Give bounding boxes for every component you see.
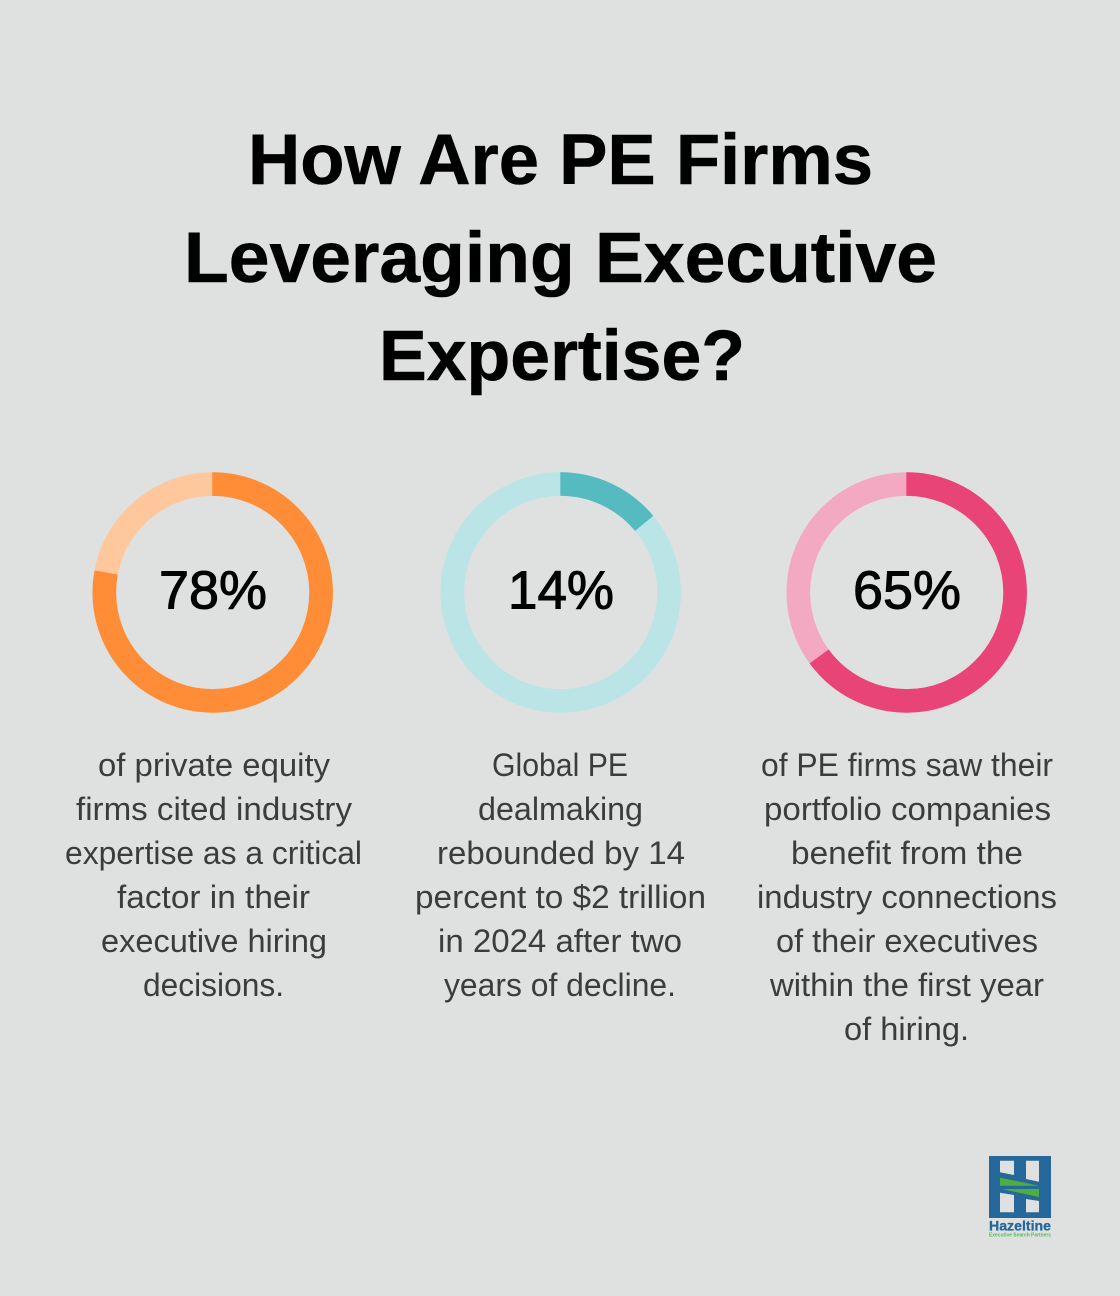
description: industry connections: within the first year: [769, 967, 1044, 1003]
value: 14%: 14%: [508, 560, 614, 620]
description: industry connections: portfolio companies: [764, 791, 1051, 827]
logo wordmark: Hazeltine: [989, 1218, 1051, 1234]
title: Expertise?: [379, 317, 745, 396]
panel: 78% statistic: [65, 484, 362, 1003]
donut chart: 14%: [452, 484, 669, 701]
title: [184, 121, 937, 396]
description: industry expertise: [65, 747, 362, 1003]
description: global dealmaking: percent to $2 trillion: [415, 879, 706, 915]
description: industry connections: benefit from the: [791, 835, 1023, 871]
donut chart: 65%: [798, 484, 1015, 701]
description: industry connections: of hiring.: [844, 1011, 969, 1047]
panel: 14% statistic: [415, 484, 706, 1003]
description: industry connections: of PE firms saw their: [761, 747, 1053, 783]
description: industry expertise: factor in their: [117, 879, 310, 915]
logo tagline: Executive Search Partners: [989, 1232, 1051, 1238]
description: global dealmaking: [415, 747, 706, 1003]
description: global dealmaking: in 2024 after two: [438, 923, 682, 959]
value: 65%: 65%: [853, 560, 961, 620]
description: industry expertise: firms cited industry: [76, 791, 352, 827]
description: industry connections: [757, 747, 1057, 1047]
description: global dealmaking: dealmaking: [478, 791, 643, 827]
panel: 65% statistic: [757, 484, 1057, 1047]
title: How Are PE Firms: [248, 121, 873, 200]
description: industry expertise: decisions.: [143, 967, 284, 1003]
donut chart: 78%: [104, 484, 321, 701]
icon: logo mark: [989, 1156, 1051, 1218]
description: industry connections: industry connections: [757, 879, 1057, 915]
description: global dealmaking: rebounded by 14: [437, 835, 685, 871]
description: industry expertise: expertise as a critical: [65, 835, 362, 871]
value: 78%: 78%: [159, 560, 267, 620]
title: Leveraging Executive: [184, 219, 937, 298]
description: industry connections: of their executives: [776, 923, 1038, 959]
description: global dealmaking: Global PE: [492, 747, 628, 783]
description: global dealmaking: years of decline.: [444, 967, 676, 1003]
logo: Hazeltine: [989, 1156, 1051, 1238]
description: industry expertise: of private equity: [98, 747, 330, 783]
description: industry expertise: executive hiring: [101, 923, 327, 959]
